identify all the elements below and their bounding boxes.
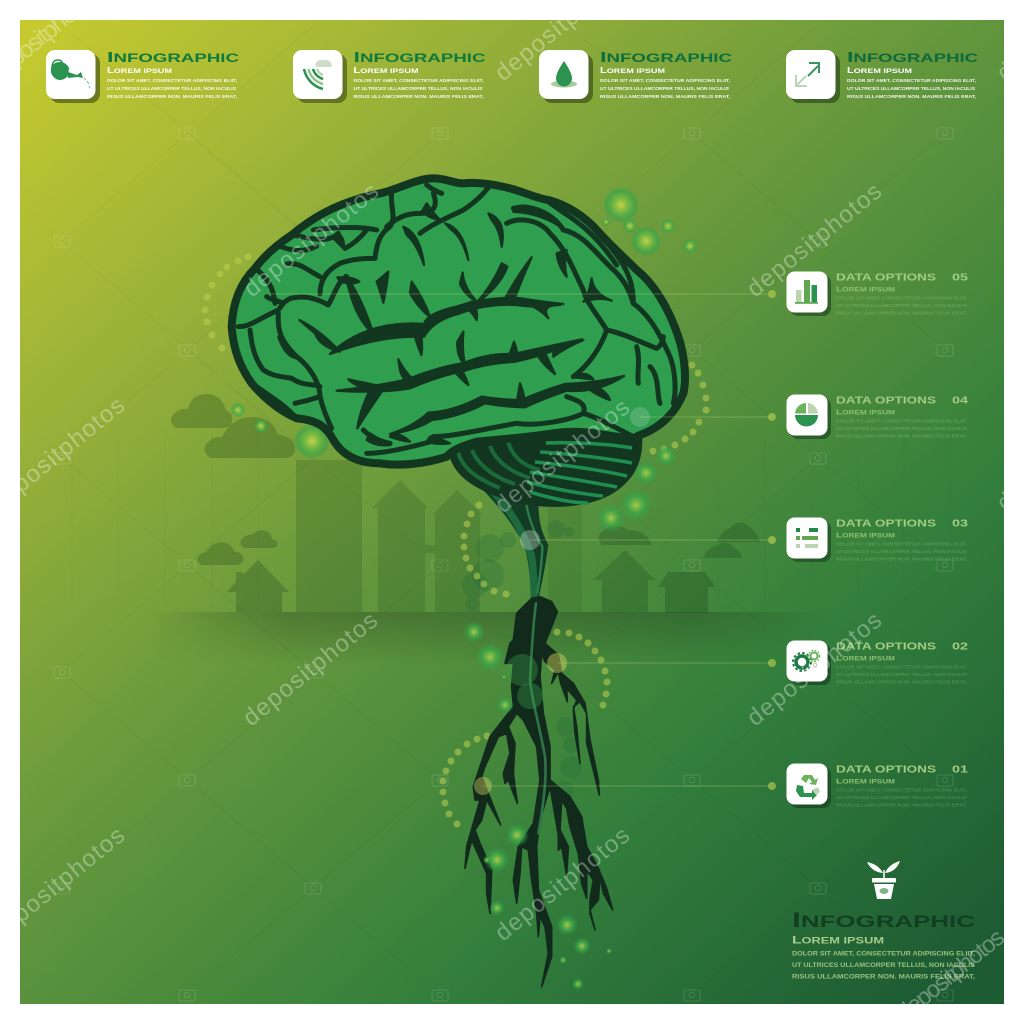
icon tile: signal arcs [293,50,347,103]
body text: DOLOR SIT AMET, CONSECTETUR ADIPISCING ELIIT, [836,788,967,792]
number: 02 [952,640,968,652]
title: DATA OPTIONS [836,764,936,776]
root vein [530,603,546,833]
icon tile: recycle [786,764,831,808]
top item 1 [46,49,240,103]
title: DATA OPTIONS [836,394,936,406]
body text: DOLOR SIT AMET, CONSECTETUR ADIPISCING ELIIT, [600,78,731,84]
bottom body text [792,950,976,980]
subtitle: L OREM IPSUM [836,284,895,294]
body text: RISUS ULLAMCORPER NON. MAURIS FELIS ERAT, [836,434,967,438]
cloud small 2 [198,542,243,565]
body text [836,664,967,684]
subheading: L OREM IPSUM [107,66,172,75]
body text: RISUS ULLAMCORPER NON. MAURIS FELIS ERAT, [107,94,238,100]
cloud small 1 [240,530,277,548]
stock watermarks: depositphotos [239,178,384,303]
brain outline and fill [232,178,685,465]
arrow building 2 [432,490,483,612]
data option 03 [786,518,968,562]
bottom body text: DOLOR SIT AMET, CONSECTETUR ADIPISCING ELIIT, [792,950,975,958]
cloud left large [171,394,232,428]
data option 05 [786,272,968,316]
cloud right 1 [598,526,652,545]
connector end dots [768,290,776,790]
tower [296,460,362,612]
building right of stem [548,500,582,612]
ground shadow [182,612,788,652]
stock watermarks: depositphotos [238,607,383,732]
body text: DOLOR SIT AMET, CONSECTETUR ADIPISCING ELIIT, [836,542,967,546]
stem highlights [493,492,534,600]
title: DATA OPTIONS [836,272,936,284]
body text: RISUS ULLAMCORPER NON. MAURIS FELIS ERAT, [836,680,967,684]
stock watermarks: depositphotos [490,822,635,947]
bottom body text: RISUS ULLAMCORPER NON. MAURIS FELIS ERAT, [792,974,975,980]
folds right [527,443,632,503]
icon tile: gears [786,640,831,685]
brain stem [473,480,548,600]
heading: INFOGRAPHIC [600,49,733,66]
foreground bubbles [463,621,612,990]
bottom body text: UT ULTRICES ULLAMCORPER TELLUS, NON IACULIS [792,962,976,969]
body text: RISUS ULLAMCORPER NON. MAURIS FELIS ERAT, [600,94,731,100]
dotted arcs [202,254,710,828]
stock watermarks: depositphotos [892,924,1010,1024]
house left [227,560,289,612]
body text: UT ULTRICES ULLAMCORPER TELLUS, NON IACULIS [107,86,237,92]
body text: DOLOR SIT AMET, CONSECTETUR ADIPISCING ELIIT, [836,418,967,424]
title: DATA OPTIONS [836,518,936,530]
data option 02 [786,640,968,685]
cloud left lower [204,417,295,458]
icon: plant in pot [867,861,900,899]
folds left [458,442,540,488]
subtitle: L OREM IPSUM [836,776,895,786]
body text [847,78,977,100]
body text: RISUS ULLAMCORPER NON. MAURIS FELIS ERAT, [354,94,484,100]
body text: RISUS ULLAMCORPER NON. MAURIS FELIS ERAT, [836,310,967,316]
body text: RISUS ULLAMCORPER NON. MAURIS FELIS ERAT, [836,802,967,808]
sulci main [238,185,675,453]
cloud right 3 [703,542,742,558]
body text [107,78,238,100]
subtitle: L OREM IPSUM [836,654,895,662]
stock watermarks: depositphotos [742,178,887,303]
body text: DOLOR SIT AMET, CONSECTETUR ADIPISCING ELIIT, [354,78,484,84]
icon tile: arrows [786,50,840,103]
arrow building [372,480,428,612]
data option 04 [786,394,968,439]
body text: DOLOR SIT AMET, CONSECTETUR ADIPISCING ELIIT, [836,296,967,300]
house right 2 [658,572,715,613]
body text [836,418,967,438]
icon tile: bar chart [786,272,831,316]
subheading: L OREM IPSUM [847,66,912,75]
icon tile: list [786,518,831,562]
body text [836,296,967,316]
body text: UT ULTRICES ULLAMCORPER TELLUS, NON IACULIS [836,426,967,431]
top item 2 [293,49,486,103]
heading: INFOGRAPHIC [354,49,486,66]
connector lines [270,294,772,786]
body text: UT ULTRICES ULLAMCORPER TELLUS, NON IACULIS [847,86,976,92]
bottom subheading: L OREM IPSUM [792,934,884,946]
body text: UT ULTRICES ULLAMCORPER TELLUS, NON IACULIS [836,672,967,677]
heading: INFOGRAPHIC [107,49,240,66]
sulci tapered [278,203,624,445]
stock watermarks: depositphotos [742,607,887,732]
subheading: L OREM IPSUM [600,66,665,75]
body text: RISUS ULLAMCORPER NON. MAURIS FELIS ERAT, [847,94,977,100]
brain stem and roots [465,480,613,987]
translucent node markers [474,407,650,795]
city silhouette [171,394,760,613]
body text [836,788,967,808]
root silhouette [465,597,613,987]
body text: DOLOR SIT AMET, CONSECTETUR ADIPISCING ELIIT, [836,664,967,670]
body text: UT ULTRICES ULLAMCORPER TELLUS, NON IACULIS [836,549,967,554]
title: DATA OPTIONS [836,640,936,652]
body text: DOLOR SIT AMET, CONSECTETUR ADIPISCING ELIIT, [107,78,238,84]
body text: RISUS ULLAMCORPER NON. MAURIS FELIS ERAT, [836,556,967,562]
heading: INFOGRAPHIC [847,49,979,66]
icon tile: watering can [46,50,100,103]
top item 4 [786,49,979,103]
body text: UT ULTRICES ULLAMCORPER TELLUS, NON IACULIS [836,303,967,308]
body text: DOLOR SIT AMET, CONSECTETUR ADIPISCING ELIIT, [847,78,977,84]
connector [425,545,435,553]
cloud right 2 [717,522,760,542]
house right 1 [593,550,655,612]
body text: UT ULTRICES ULLAMCORPER TELLUS, NON IACULIS [354,86,483,92]
number: 04 [952,394,968,406]
cerebellum [448,425,642,507]
stock watermarks: depositphotos [490,394,635,519]
bubbles behind brain [231,187,697,533]
data option 01 [786,764,968,808]
number: 01 [952,764,968,776]
bottom heading: INFOGRAPHIC [792,909,975,932]
body text [836,542,967,562]
dark background bubbles [462,520,582,799]
subtitle: L OREM IPSUM [836,530,895,540]
subheading: L OREM IPSUM [354,66,418,75]
icon tile: pie chart [786,394,831,439]
body text: UT ULTRICES ULLAMCORPER TELLUS, NON IACULIS [600,86,730,92]
body text: UT ULTRICES ULLAMCORPER TELLUS, NON IACULIS [836,795,967,800]
subtitle: L OREM IPSUM [836,408,895,416]
number: 05 [952,272,968,284]
number: 03 [952,518,968,530]
brain [232,178,685,465]
body text [354,78,484,100]
icon tile: water drop [539,50,593,103]
body text [600,78,731,100]
camera watermark marks [54,128,953,1001]
top item 3 [539,49,733,103]
